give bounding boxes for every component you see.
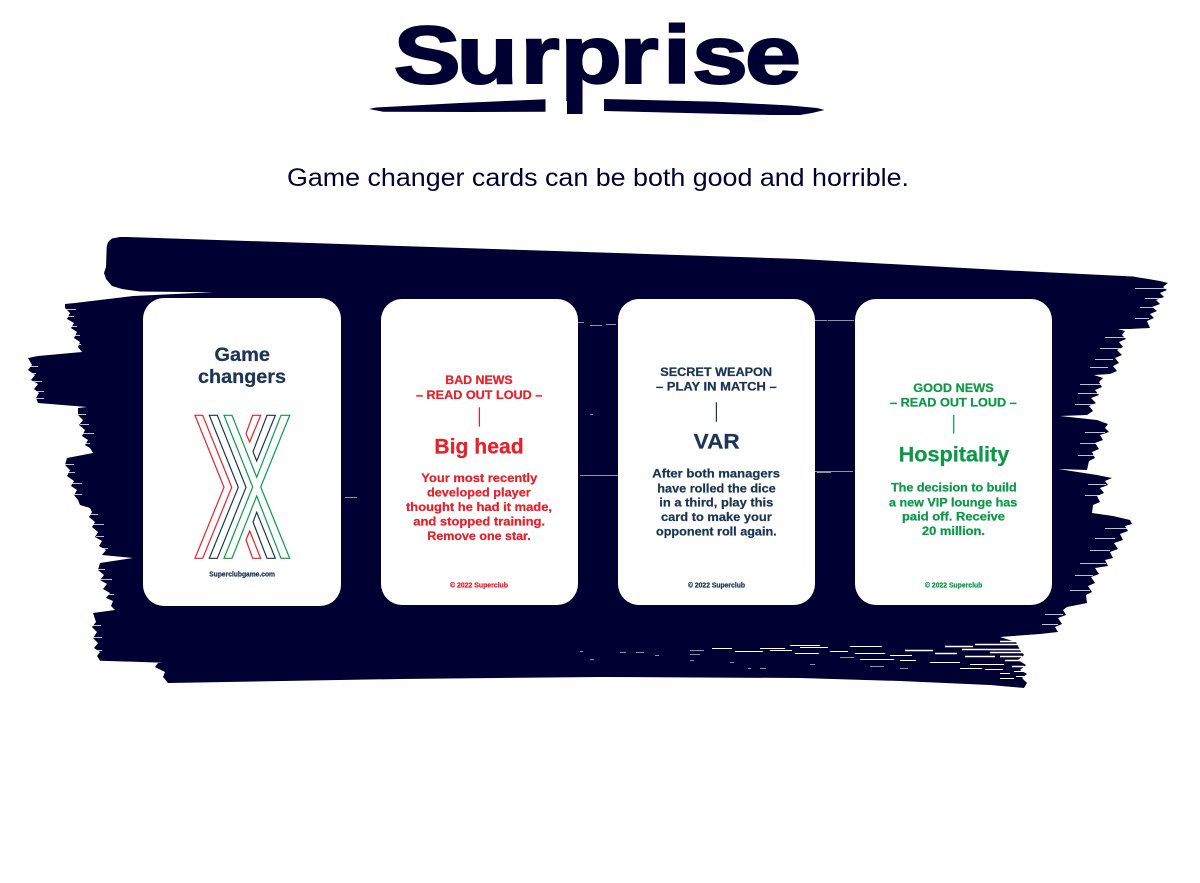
card name: VAR [694,430,740,453]
card title [198,345,286,388]
card heading [656,365,777,393]
icon: striped X logo [195,415,290,558]
card text: paid off. Receive [902,510,1005,524]
card heading [890,381,1017,409]
brush stroke background [26,237,1168,688]
card name: Hospitality [899,444,1010,467]
card heading [416,373,543,402]
card text: card to make your [661,510,772,524]
card text: Your most recently [421,471,538,485]
card text: a new VIP lounge has [889,495,1018,509]
card 1: Game changers cover [143,298,341,606]
card text: and stopped training. [413,514,545,528]
card 4: Good news [855,299,1052,605]
card title: Game [214,345,270,366]
card text: thought he had it made, [406,500,552,514]
card text [889,480,1018,538]
brush fray: left and right edges [26,288,1167,650]
copyright: © 2022 Superclub [450,581,508,589]
subtitle: Game changer cards can be both good and horrible. [287,164,909,192]
card 2: Bad news [381,299,578,605]
card text [652,466,780,538]
card heading: – READ OUT LOUD – [416,388,543,402]
card text: opponent roll again. [656,524,777,538]
copyright: © 2022 Superclub [925,581,982,589]
card heading: BAD NEWS [445,373,513,387]
card heading: GOOD NEWS [913,381,994,395]
card text [406,471,552,543]
card heading: – PLAY IN MATCH – [656,379,777,393]
website: Superclubgame.com [209,572,275,578]
card name: Big head [434,435,524,458]
card text: developed player [427,486,531,500]
card title: changers [198,367,286,388]
card text: have rolled the dice [657,481,776,495]
title: Surprise: Surprise [394,10,801,101]
card text: After both managers [652,466,780,480]
card 3: Secret weapon [618,299,815,605]
card text: in a third, play this [659,496,774,510]
card heading: SECRET WEAPON [660,365,772,379]
card text: 20 million. [922,524,985,538]
copyright: © 2022 Superclub [688,581,745,589]
card text: The decision to build [891,480,1017,494]
card heading: – READ OUT LOUD – [890,395,1017,409]
card text: Remove one star. [427,529,531,543]
